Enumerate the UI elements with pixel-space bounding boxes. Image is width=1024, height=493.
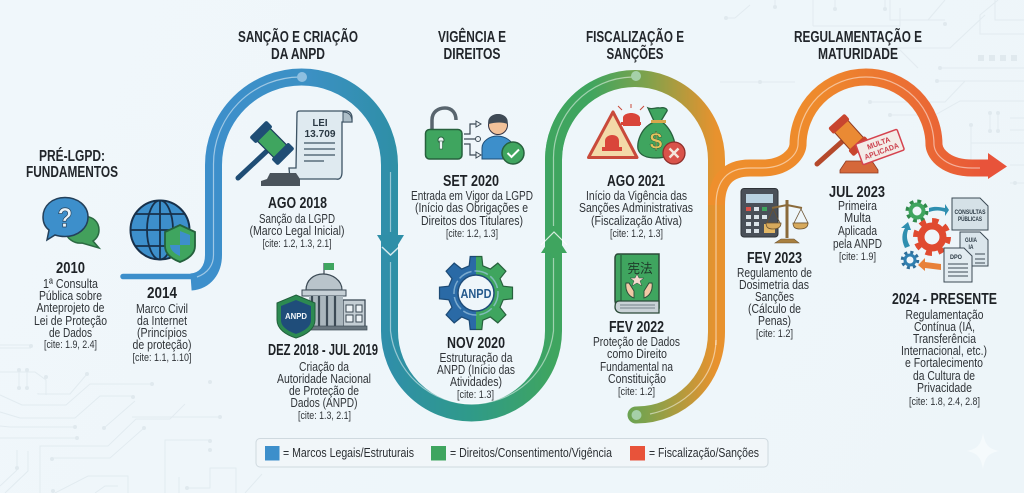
heading: regulamentacao (794, 28, 922, 63)
milestone: NOV 2020: Atividades) (450, 375, 502, 389)
heading: sancao: SANÇÃO E CRIAÇÃO (238, 28, 358, 46)
icon: gavel and stamp (817, 114, 904, 173)
milestone: DEZ 2018 - JUL 2019: [cite: 1.3, 2.1] (298, 410, 351, 422)
milestone: NOV 2020: Estruturação da (440, 351, 513, 365)
heading: sancao (238, 28, 358, 63)
icon: gavel and law scroll: LEI (312, 117, 328, 129)
icon: gavel and law scroll (238, 111, 352, 186)
milestone: FEV 2022: FEV 2022 (609, 319, 664, 336)
milestone: DEZ 2018 - JUL 2019: de Proteção de (289, 384, 359, 398)
milestone: 2010: 1ª Consulta (43, 277, 98, 291)
milestone: 2010: Pública sobre (39, 289, 102, 303)
milestone: JUL 2023: [cite: 1.9] (839, 251, 876, 263)
milestone: 2014: [cite: 1.1, 1.10] (132, 352, 192, 364)
legend label: green: = Direitos/Consentimento/Vigência (450, 446, 612, 460)
icon: gavel and stamp: MULTA (866, 135, 892, 152)
heading: vigencia (438, 28, 506, 63)
icon: gears and documents: IA (968, 245, 974, 251)
milestone: DEZ 2018 - JUL 2019: Autoridade Nacional (277, 372, 371, 386)
segment: blue thin start (123, 274, 196, 279)
segment: orange to red branch (716, 77, 992, 205)
milestone: FEV 2022: [cite: 1.2] (618, 386, 655, 398)
milestone: DEZ 2018 - JUL 2019: Dados (ANPD) (290, 396, 358, 410)
icon: calculator and scales (741, 188, 808, 243)
icon: constitution book (615, 254, 659, 313)
milestone: 2010 (34, 198, 107, 351)
milestone: 2014: Marco Civil (136, 302, 188, 316)
milestone: 2024 - PRESENTE: Internacional, etc.) (901, 344, 987, 358)
milestone: FEV 2022: Fundamental na (600, 360, 673, 374)
milestone: JUL 2023: Multa (844, 211, 871, 225)
milestone: FEV 2022 (593, 254, 680, 398)
heading: pre-LGPD: FUNDAMENTOS (26, 164, 118, 181)
milestone: NOV 2020: [cite: 1.3] (457, 389, 494, 401)
milestone: 2014: de proteção) (132, 338, 192, 352)
legend label: red: = Fiscalização/Sanções (649, 446, 759, 460)
milestone: AGO 2021: (Fiscalização Ativa) (591, 214, 682, 228)
milestone: DEZ 2018 - JUL 2019: DEZ 2018 - JUL 2019 (268, 342, 378, 359)
icon: alert triangle, money bag: $ (650, 128, 663, 154)
node dots (297, 71, 642, 420)
milestone: AGO 2021 (579, 104, 693, 240)
milestone: AGO 2021: Início da Vigência das (586, 189, 687, 203)
icon: government building and shield (277, 263, 367, 338)
icon: gears and documents: GUIA (965, 238, 978, 244)
milestone: 2014 (130, 200, 195, 364)
icon: gears and documents (901, 198, 988, 282)
icon: gavel and stamp: APLICADA (863, 141, 901, 162)
icon: open lock and person (426, 108, 524, 164)
milestone: JUL 2023: Aplicada (838, 224, 877, 238)
milestone: 2014: (Princípios (137, 326, 187, 340)
milestone: FEV 2023: (Cálculo de (748, 302, 801, 316)
heading: pre-LGPD: PRÉ-LGPD: (39, 148, 105, 165)
segment: blue to green loop (191, 77, 595, 413)
heading: fiscalizacao: SANÇÕES (606, 45, 664, 63)
milestone: 2024 - PRESENTE: [cite: 1.8, 2.4, 2.8] (909, 396, 980, 408)
milestone: 2010: 2010 (56, 260, 85, 277)
milestone: FEV 2023: Penas) (758, 314, 791, 328)
heading: regulamentacao: REGULAMENTAÇÃO E (794, 28, 922, 46)
icon: gears and documents: PÚBLICAS (958, 216, 982, 223)
legend swatch: red (630, 446, 645, 460)
heading: vigencia: VIGÊNCIA E (438, 28, 506, 46)
milestone: AGO 2021: Sanções Administrativas (579, 201, 693, 215)
milestone: FEV 2023: [cite: 1.2] (756, 328, 793, 340)
icon: globe with shield (130, 200, 195, 262)
milestone: NOV 2020 (437, 256, 515, 401)
milestone: 2024 - PRESENTE: Regulamentação (906, 308, 984, 322)
milestone: 2010: de Dados (49, 326, 92, 340)
milestone: AGO 2018 (238, 111, 352, 250)
milestone: AGO 2018: Sanção da LGPD (259, 212, 335, 226)
milestone: SET 2020: [cite: 1.2, 1.3] (446, 228, 498, 240)
milestone: SET 2020: (Início das Obrigações e (415, 201, 528, 215)
milestone: DEZ 2018 - JUL 2019 (268, 263, 378, 422)
milestone: FEV 2023: Sanções (755, 290, 794, 304)
milestone: 2024 - PRESENTE: e Fortalecimento (905, 356, 983, 370)
icon: gavel and law scroll: 13.709 (304, 128, 336, 140)
milestone: JUL 2023: pela ANPD (833, 237, 882, 251)
milestone: FEV 2022: como Direito (607, 347, 667, 361)
milestone: 2014: 2014 (147, 285, 177, 302)
milestone: AGO 2018: (Marco Legal Inicial) (250, 224, 344, 238)
milestone: JUL 2023 (817, 114, 904, 263)
milestone: AGO 2018: AGO 2018 (268, 195, 327, 212)
arrow head end (980, 153, 1007, 179)
arrow down chevron (382, 247, 399, 255)
heading: sancao: DA ANPD (271, 46, 325, 63)
icon: speech bubbles: ? (58, 202, 72, 233)
milestone: SET 2020: SET 2020 (443, 173, 499, 190)
milestone: FEV 2023 (737, 188, 812, 340)
milestone: FEV 2023: FEV 2023 (747, 250, 802, 267)
legend label: blue: = Marcos Legais/Estruturais (283, 446, 414, 460)
icon: constitution book: 宪法 (628, 261, 652, 276)
milestone: NOV 2020: NOV 2020 (447, 335, 505, 352)
milestone: 2024 - PRESENTE: Contínua (IA, (914, 320, 975, 334)
milestone: 2024 - PRESENTE: 2024 - PRESENTE (892, 291, 997, 308)
arrow up (541, 233, 567, 253)
heading: regulamentacao: MATURIDADE (818, 46, 898, 63)
timeline path (123, 77, 992, 415)
arrow up chevron (541, 232, 567, 245)
milestone: 2010: Lei de Proteção (34, 314, 107, 328)
legend swatch: green (431, 446, 446, 460)
milestone: FEV 2023: Regulamento de (737, 266, 812, 280)
icon: speech bubbles (43, 198, 99, 248)
milestone: AGO 2021: [cite: 1.2, 1.3] (610, 228, 663, 240)
milestone: SET 2020: Entrada em Vigor da LGPD (411, 189, 533, 203)
milestone: JUL 2023: JUL 2023 (829, 184, 885, 201)
legend (256, 438, 768, 467)
icon: gears and documents: CONSULTAS (954, 210, 986, 216)
milestone: NOV 2020: ANPD (Início das (437, 363, 515, 377)
milestone: 2024 - PRESENTE: Privacidade (917, 381, 972, 395)
milestone: DEZ 2018 - JUL 2019: Criação da (299, 360, 349, 374)
arrow down (377, 235, 404, 257)
icon: gears and documents: DPO (950, 255, 962, 261)
milestone: 2010: Anteprojeto de (36, 301, 105, 315)
milestone: FEV 2022: Constituição (608, 372, 666, 386)
legend swatch: blue (265, 446, 280, 460)
milestone: 2024 - PRESENTE: Transferência (913, 332, 976, 346)
icon: ANPD gear: ANPD (460, 286, 492, 301)
milestone: FEV 2023: Dosimetria das (739, 278, 809, 292)
milestone: 2024 - PRESENTE: da Cultura de (913, 369, 975, 383)
milestone: FEV 2022: Proteção de Dados (593, 335, 680, 349)
milestone: SET 2020 (411, 108, 533, 240)
icon: government building and shield: ANPD (285, 311, 307, 321)
milestone: JUL 2023: Primeira (838, 199, 877, 213)
milestone: 2010: [cite: 1.9, 2.4] (44, 339, 97, 351)
segment: green to orange hook (554, 79, 716, 415)
heading: vigencia: DIREITOS (444, 46, 500, 63)
milestone: SET 2020: Direitos dos Titulares) (421, 214, 523, 228)
heading: fiscalizacao (586, 28, 684, 63)
milestone: AGO 2018: [cite: 1.2, 1.3, 2.1] (262, 238, 332, 250)
white centre highlights (197, 77, 985, 414)
heading: fiscalizacao: FISCALIZAÇÃO E (586, 28, 684, 46)
decorative sparkle (967, 433, 999, 469)
icon: ANPD gear (440, 256, 512, 330)
milestone: 2024 - PRESENTE (892, 198, 997, 408)
milestone: 2014: da Internet (137, 314, 187, 328)
milestone: AGO 2021: AGO 2021 (607, 173, 665, 190)
heading: pre-LGPD (26, 148, 118, 181)
